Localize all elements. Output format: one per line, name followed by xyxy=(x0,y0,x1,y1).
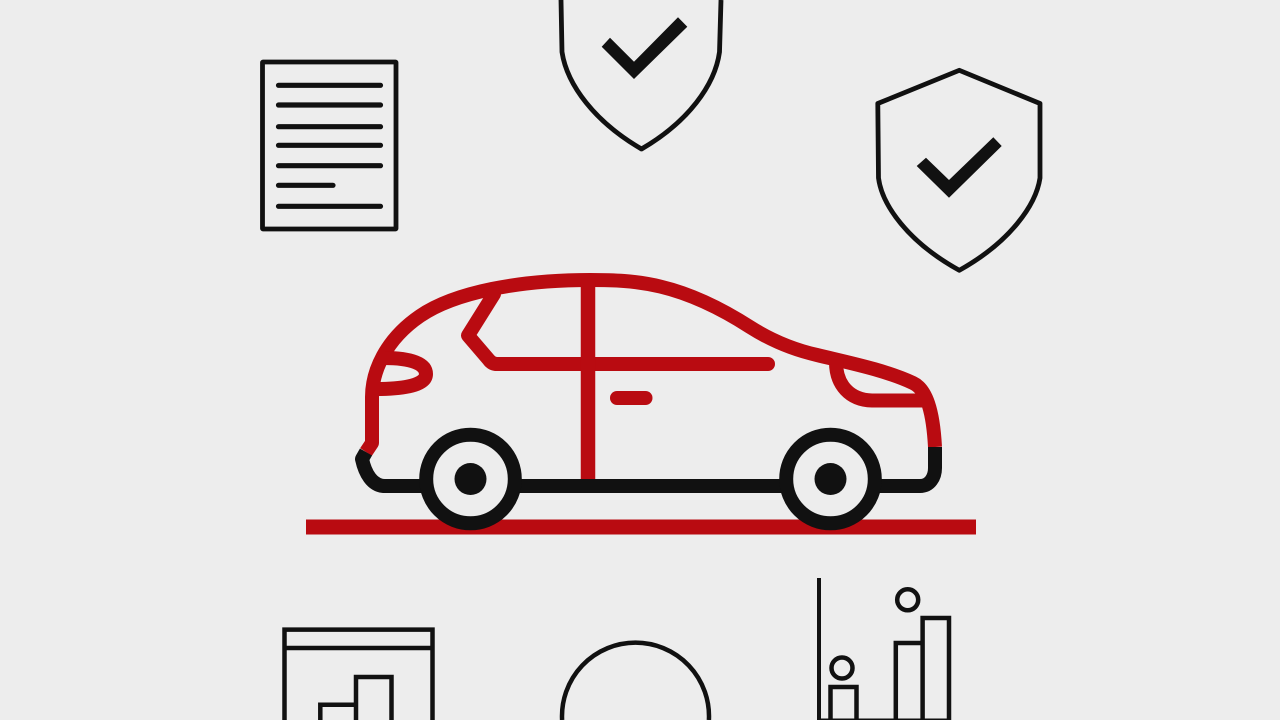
illustration: car xyxy=(362,280,935,523)
car underbody black xyxy=(362,447,935,486)
car body outline red xyxy=(366,280,935,452)
left light xyxy=(376,358,426,389)
right wheel xyxy=(786,435,875,523)
icon: bar chart with dots xyxy=(819,578,950,720)
icon: document xyxy=(262,62,396,229)
icon: browser with bar chart xyxy=(284,630,432,720)
right light xyxy=(836,362,926,400)
door pillar xyxy=(581,282,595,480)
door handle xyxy=(617,391,646,405)
left wheel xyxy=(426,435,515,523)
icon: top shield with check xyxy=(561,0,721,149)
icon: circle xyxy=(562,643,709,720)
rear window and belt line xyxy=(468,294,768,364)
icon: right shield with check xyxy=(878,70,1040,270)
road line xyxy=(306,520,976,534)
